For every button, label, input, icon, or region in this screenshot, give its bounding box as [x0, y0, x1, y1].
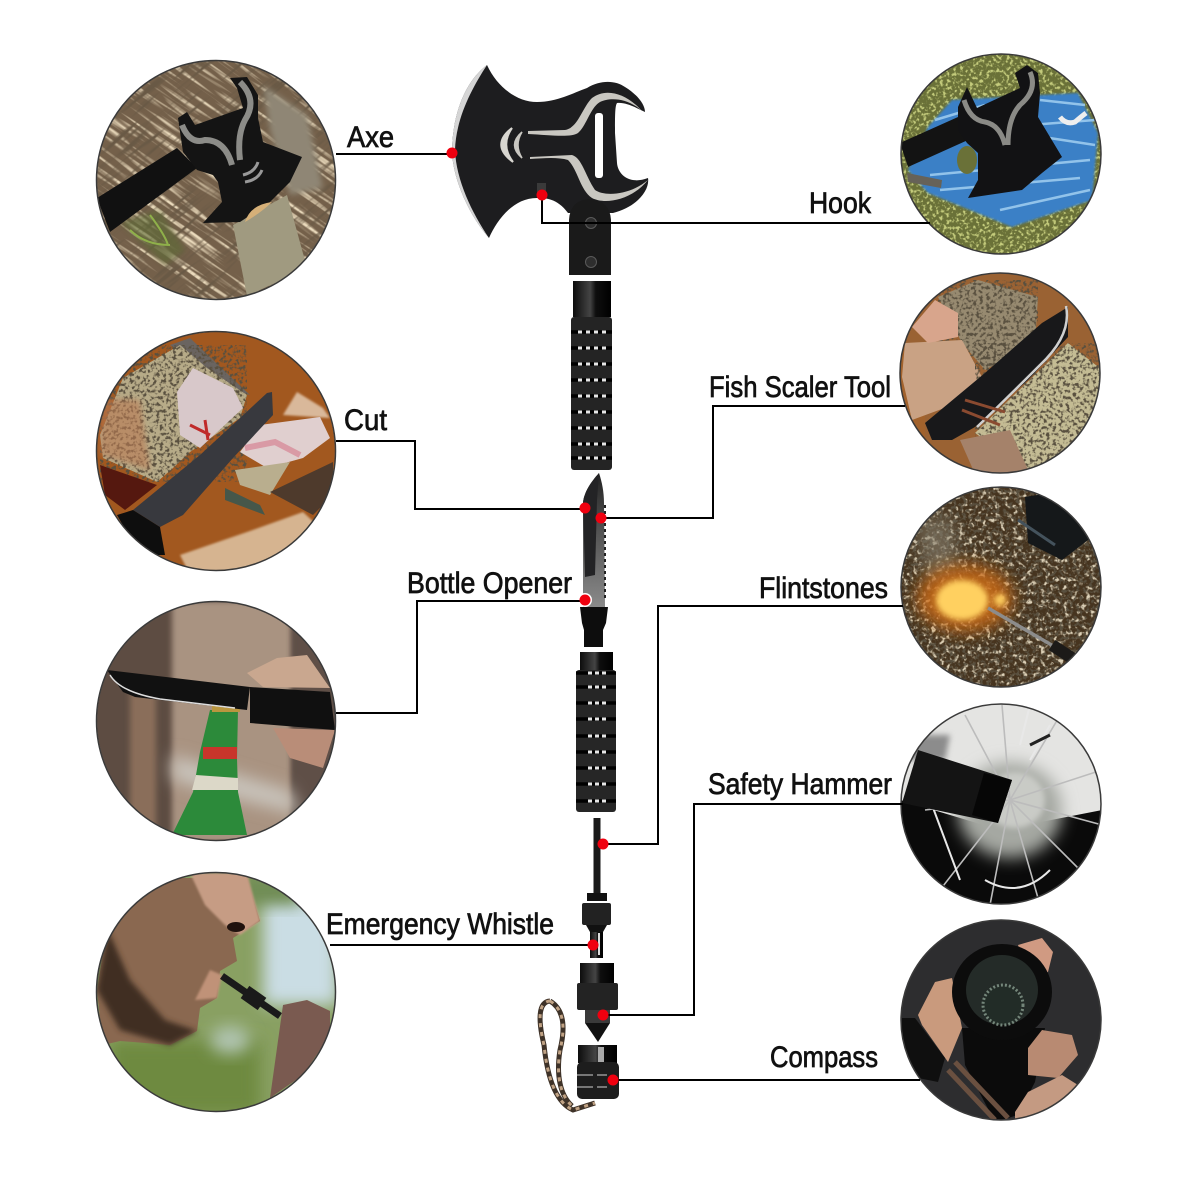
tool: upper handle — [571, 281, 612, 470]
callout dots — [446, 148, 618, 1086]
photo circle: fish scaler on fish — [899, 272, 1102, 474]
photo circle: man blowing whistle — [96, 873, 338, 1115]
photo circle: hook on blue rope — [900, 54, 1102, 256]
photo circle: knife cutting fish — [96, 331, 338, 575]
photo circle: bottle opener — [96, 601, 338, 845]
tool: lower handle — [576, 652, 616, 812]
callout lines — [330, 154, 930, 1080]
photo circle: shattered glass — [900, 703, 1102, 905]
label: Emergency Whistle: Emergency Whistle — [326, 908, 554, 941]
label: Hook: Hook — [809, 187, 872, 220]
label: Flintstones: Flintstones — [759, 572, 888, 605]
tool: safety hammer — [577, 963, 618, 1042]
label: Cut: Cut — [344, 404, 388, 437]
label: Compass: Compass — [770, 1041, 878, 1074]
tool: flint rod and whistle — [582, 818, 611, 958]
tool: axe head — [452, 65, 648, 238]
tool: axe collar — [569, 199, 611, 275]
photo circle: flint sparks — [900, 486, 1102, 688]
label: Safety Hammer: Safety Hammer — [708, 768, 892, 801]
label: Fish Scaler Tool: Fish Scaler Tool — [709, 371, 891, 404]
photo circle: axe chopping wood — [97, 61, 335, 299]
photo circle: compass in hand — [900, 920, 1102, 1122]
tool: compass cap and paracord — [540, 1001, 619, 1110]
tool: serrated knife — [578, 473, 608, 647]
label: Axe: Axe — [347, 121, 394, 154]
circle outlines — [96, 54, 1101, 1120]
label: Bottle Opener: Bottle Opener — [407, 567, 572, 600]
